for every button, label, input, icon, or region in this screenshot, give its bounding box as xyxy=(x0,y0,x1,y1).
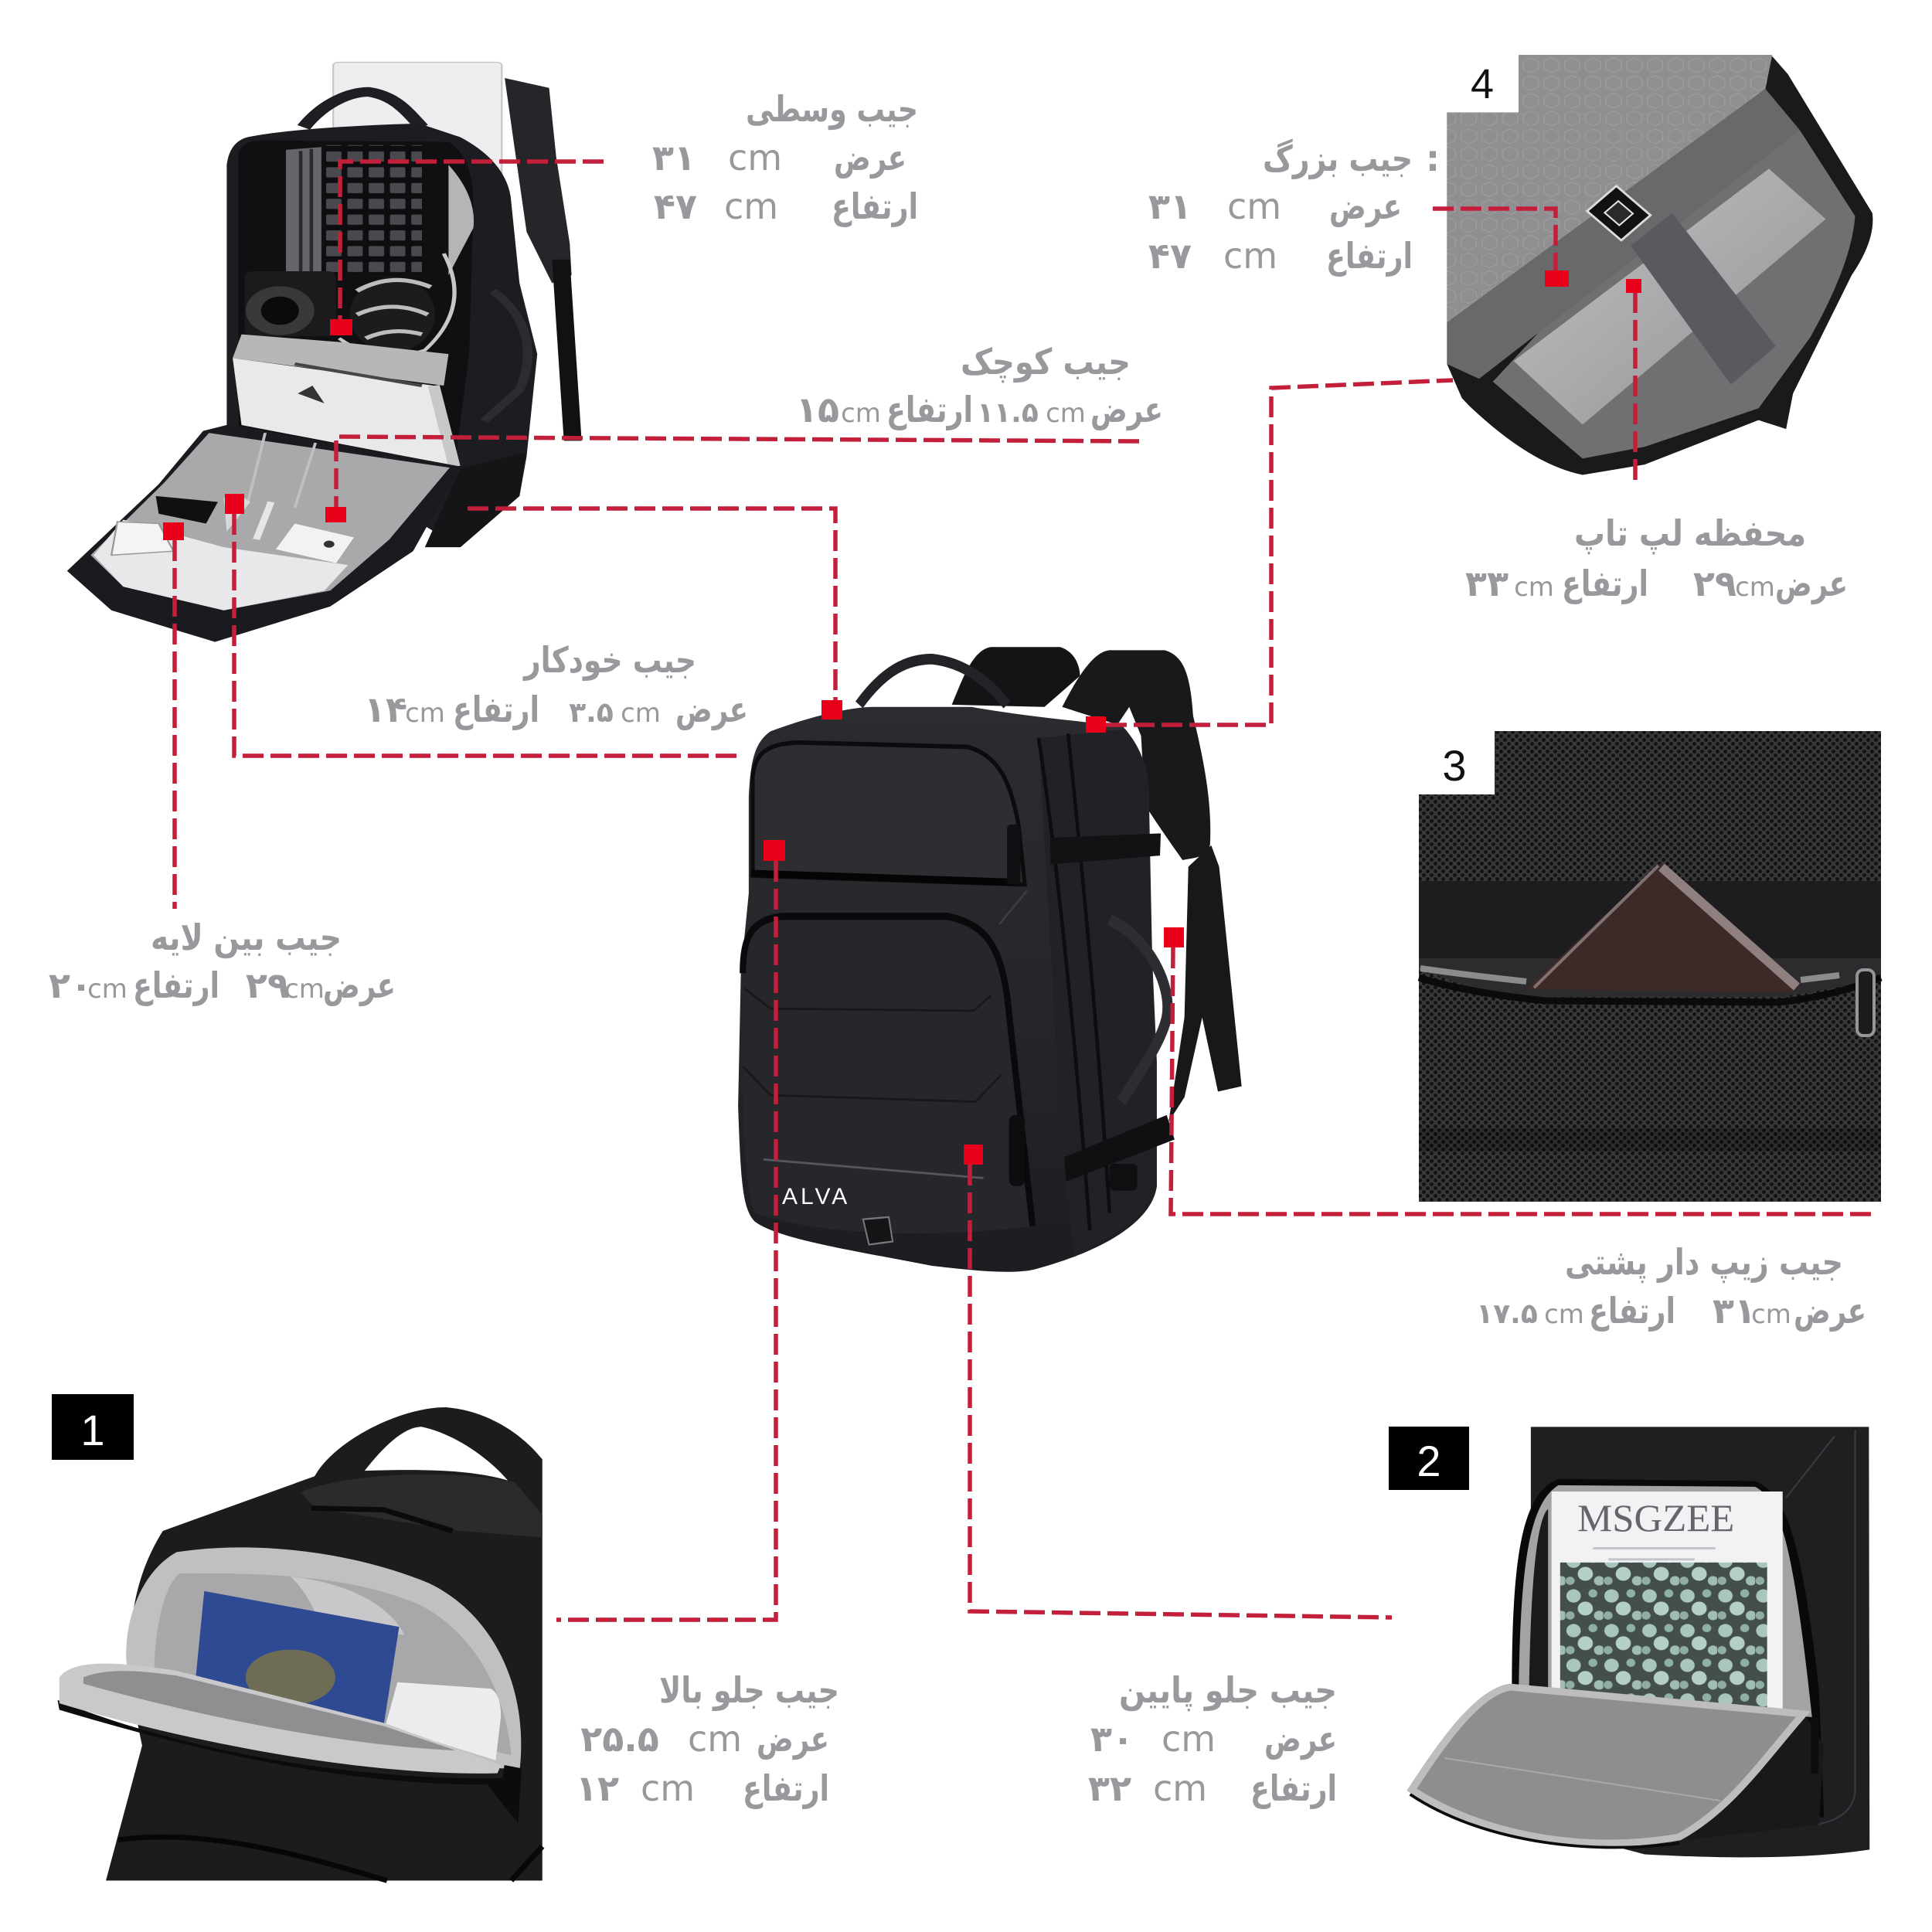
label: middle pocket: ۳۱ xyxy=(652,137,696,179)
buckle xyxy=(1587,186,1651,240)
upper side buckle xyxy=(1050,833,1161,865)
label: laptop sleeve: ۳۳ xyxy=(1465,563,1509,604)
label: pen pocket: عرض xyxy=(675,689,748,730)
strap band xyxy=(1419,881,1881,958)
badge box xyxy=(1447,39,1519,97)
label: laptop sleeve xyxy=(1465,512,1848,604)
second pen xyxy=(257,502,271,539)
label: front upper pocket: ۱۲ xyxy=(576,1767,619,1809)
badge box xyxy=(52,1394,134,1460)
label: back zip pocket: ۳۱ xyxy=(1713,1290,1756,1332)
magazine image xyxy=(1560,1563,1767,1717)
headphones cup xyxy=(350,277,435,352)
hex flap xyxy=(1447,55,1772,322)
label: front lower pocket: ارتفاع xyxy=(1250,1767,1337,1809)
leader line: laptop sleeve xyxy=(1633,292,1638,487)
label: between layer pocket: جیب بین لایه xyxy=(151,917,342,958)
marker: middle pocket xyxy=(330,319,352,335)
badge number: 4 xyxy=(1471,61,1494,107)
marker: pen pocket xyxy=(225,494,244,514)
label: back zip pocket: cm xyxy=(1544,1299,1584,1330)
flap rim xyxy=(60,1664,501,1774)
label: middle pocket xyxy=(652,88,918,227)
label: small pocket: ۱۱.۵ xyxy=(977,397,1039,429)
band xyxy=(1447,89,1800,379)
label: between layer pocket: cm xyxy=(87,974,128,1005)
label: front lower pocket: cm xyxy=(1162,1718,1216,1760)
label: small pocket: cm xyxy=(841,398,881,429)
grey piping xyxy=(764,1159,983,1178)
leader line: small pocket xyxy=(336,437,1139,508)
leader line: middle pocket xyxy=(340,162,604,320)
book cover xyxy=(233,358,448,464)
badge box xyxy=(1419,731,1495,794)
label: big pocket: cm xyxy=(1227,185,1281,227)
magazine xyxy=(1552,1492,1783,1719)
pocket opening xyxy=(1512,1479,1824,1818)
badge: 2 xyxy=(1389,1427,1469,1490)
label: pen pocket: ارتفاع xyxy=(453,689,539,730)
book figure xyxy=(298,386,325,403)
label: big pocket: ۳۱ xyxy=(1148,185,1192,227)
leader line: big pocket xyxy=(1433,209,1556,270)
marker: shoulder xyxy=(1086,716,1106,733)
leader line: front upper pocket xyxy=(556,861,776,1620)
bag body xyxy=(738,707,1157,1272)
label: between layer pocket: ۲۹ xyxy=(246,964,289,1006)
flap lining xyxy=(90,433,450,611)
label: front upper pocket: عرض xyxy=(757,1718,829,1760)
lower pocket zip xyxy=(743,917,1032,1226)
label: back zip pocket xyxy=(1476,1241,1866,1332)
interior xyxy=(239,141,474,467)
label: front lower pocket: جیب جلو پایین xyxy=(1119,1669,1337,1712)
flap shell xyxy=(67,424,461,642)
right shoulder strap xyxy=(1062,650,1210,860)
magazine small lines xyxy=(1593,1548,1716,1560)
marker: back zip pocket xyxy=(1164,927,1184,947)
leader line: between layer pocket xyxy=(172,540,177,909)
hanging strap xyxy=(552,260,582,440)
flap inner xyxy=(83,1671,456,1750)
lower pocket xyxy=(742,917,1032,1233)
mesh background xyxy=(1419,731,1881,1202)
badge number: 2 xyxy=(1417,1437,1441,1485)
headphones xyxy=(350,277,435,352)
lower side lock xyxy=(1110,1164,1137,1190)
label: middle pocket: cm xyxy=(724,185,778,227)
label: small pocket: cm xyxy=(1046,398,1086,429)
label: front lower pocket: عرض xyxy=(1264,1718,1337,1760)
inner shadow xyxy=(1529,1509,1548,1692)
panel: main backpack xyxy=(738,647,1242,1272)
interior highlight xyxy=(291,1577,404,1635)
label: back zip pocket: عرض xyxy=(1794,1290,1866,1332)
panel: open backpack, main compartment xyxy=(67,63,582,642)
wallet stitching xyxy=(1534,866,1658,988)
label: front lower pocket: cm xyxy=(1153,1767,1207,1809)
leader line: front lower pocket xyxy=(970,1165,1392,1617)
panel 1: front upper pocket xyxy=(58,1407,543,1880)
book title xyxy=(294,364,422,386)
flap seam xyxy=(1444,1758,1720,1801)
books xyxy=(233,335,454,467)
pocket lining xyxy=(1519,1485,1812,1717)
keyboard xyxy=(325,145,422,275)
quilt lines xyxy=(743,988,1001,1102)
camera body xyxy=(244,271,336,336)
marker: between layer pocket xyxy=(163,522,184,540)
pocket rim xyxy=(126,1547,521,1768)
label: laptop sleeve: عرض xyxy=(1775,563,1848,604)
top pocket xyxy=(753,743,1025,884)
left sleeve xyxy=(286,147,321,271)
strap xyxy=(1631,213,1776,385)
passport xyxy=(196,1591,399,1726)
shell xyxy=(1447,55,1872,474)
zip edge xyxy=(1419,978,1881,1002)
label: laptop sleeve: محفظه لپ تاپ xyxy=(1574,512,1806,554)
sleeve highlight xyxy=(301,149,311,271)
panel 4: big pocket and laptop sleeve xyxy=(1447,55,1872,474)
top handle xyxy=(859,659,1007,705)
badge number: 1 xyxy=(80,1406,105,1454)
label: pen pocket: ۳.۵ xyxy=(569,697,614,729)
label: laptop sleeve: ۲۹ xyxy=(1693,563,1736,604)
label: small pocket: ارتفاع xyxy=(886,389,973,430)
flap dark lip xyxy=(58,1700,522,1824)
buckle outer xyxy=(1587,186,1651,240)
label: back zip pocket: ۱۷.۵ xyxy=(1476,1298,1538,1330)
zip opening xyxy=(1419,958,1881,997)
label: back zip pocket: جیب زیپ دار پشتی xyxy=(1565,1241,1843,1284)
left shoulder strap xyxy=(952,647,1080,707)
magazine title: MSGZEE xyxy=(1577,1498,1734,1539)
diagonal seam xyxy=(999,891,1027,924)
side seams xyxy=(1039,733,1110,1230)
bottom tab xyxy=(863,1217,893,1244)
camera xyxy=(244,271,336,336)
lower mesh shadow xyxy=(1419,1128,1881,1151)
logo: ALVA: ALVA xyxy=(782,1184,850,1209)
label: between layer pocket: عرض xyxy=(323,964,396,1006)
label: laptop sleeve: cm xyxy=(1735,572,1775,603)
bag body xyxy=(226,124,537,547)
marker: laptop sleeve xyxy=(1626,279,1641,293)
label: front lower pocket: ۳۲ xyxy=(1088,1767,1131,1809)
label: between layer pocket xyxy=(49,917,396,1006)
grey lining xyxy=(448,165,474,275)
laptop sticking out xyxy=(333,63,502,181)
marker: big pocket xyxy=(1545,270,1569,287)
label: big pocket xyxy=(1148,138,1440,277)
label: middle pocket: جیب وسطی xyxy=(746,88,918,130)
label: small pocket: عرض xyxy=(1090,389,1163,430)
label: pen pocket: cm xyxy=(405,698,445,729)
marker: front lower pocket xyxy=(964,1145,983,1165)
card xyxy=(111,522,174,555)
label: front lower pocket: ۳۰ xyxy=(1090,1718,1134,1760)
top zip pull xyxy=(1007,825,1020,884)
top zip xyxy=(311,1509,453,1531)
hanging strap xyxy=(1168,845,1242,1121)
label: big pocket: cm xyxy=(1223,235,1277,277)
lower side buckle xyxy=(1064,1115,1175,1182)
wallet xyxy=(1526,863,1799,993)
label: between layer pocket: cm xyxy=(284,974,325,1005)
label: big pocket: ۴۷ xyxy=(1148,235,1192,277)
badge box xyxy=(1389,1427,1469,1490)
flap outer edge xyxy=(1410,1794,1679,1848)
label: middle pocket: عرض xyxy=(834,137,906,179)
bag shell xyxy=(1531,1427,1869,1857)
lower zip lock xyxy=(1009,1115,1025,1186)
leader line: shoulder to panel 4 xyxy=(1106,380,1453,725)
label: front upper pocket xyxy=(576,1669,839,1809)
label: between layer pocket: ارتفاع xyxy=(133,964,219,1006)
headphones highlights xyxy=(357,280,430,338)
laptop xyxy=(1514,168,1826,424)
label: small pocket: جیب کوچک xyxy=(961,341,1131,383)
panel 3: back zip pocket xyxy=(1419,731,1881,1202)
handle gap xyxy=(365,1427,508,1481)
label: big pocket: عرض xyxy=(1329,185,1402,227)
label: front upper pocket: جیب جلو بالا xyxy=(659,1669,839,1711)
label: middle pocket: cm xyxy=(728,137,782,179)
badge: 4 xyxy=(1447,39,1519,107)
label: big pocket: ارتفاع xyxy=(1326,235,1413,277)
flap divider xyxy=(247,433,315,508)
label: laptop sleeve: ارتفاع xyxy=(1562,563,1648,604)
lower pocket line xyxy=(118,1837,543,1880)
label: laptop sleeve: cm xyxy=(1514,572,1554,603)
top pocket shadow xyxy=(750,873,1015,883)
side grab handle xyxy=(484,291,528,421)
opening highlight xyxy=(1420,968,1839,981)
wallet edge xyxy=(1662,867,1797,987)
top handle xyxy=(304,92,422,128)
top panel xyxy=(301,1475,543,1537)
charger xyxy=(386,1682,501,1760)
marker: front upper pocket xyxy=(764,840,785,861)
label: pen pocket xyxy=(364,639,748,730)
label: big pocket: : xyxy=(1426,138,1440,179)
label: middle pocket: ۴۷ xyxy=(654,185,697,227)
label: front upper pocket: cm xyxy=(641,1767,695,1809)
label: back zip pocket: cm xyxy=(1751,1299,1791,1330)
pen xyxy=(224,498,250,532)
zip pull xyxy=(1811,1717,1818,1774)
zip pull xyxy=(1857,970,1874,1036)
panel 2: front lower pocket xyxy=(1410,1427,1869,1857)
dark wedge xyxy=(1686,1713,1824,1840)
phone camera xyxy=(324,540,335,548)
leader line: handle to main backpack xyxy=(468,509,835,701)
flap xyxy=(1412,1687,1804,1843)
flap light area xyxy=(94,519,348,611)
book edge xyxy=(434,386,454,467)
label: front upper pocket: ارتفاع xyxy=(743,1767,829,1809)
label: front upper pocket: cm xyxy=(688,1718,742,1760)
label: between layer pocket: ۲۰ xyxy=(49,964,92,1006)
badge number: 3 xyxy=(1442,741,1467,790)
label: front lower pocket xyxy=(1088,1669,1337,1809)
label: back zip pocket: ارتفاع xyxy=(1589,1290,1675,1332)
label: middle pocket: ارتفاع xyxy=(832,185,918,227)
label: pen pocket: ۱۴ xyxy=(364,689,407,730)
cable xyxy=(339,253,454,355)
leader line: pen pocket xyxy=(234,514,743,756)
camera lens xyxy=(246,286,315,335)
interior lining xyxy=(1493,89,1855,458)
side grab handle xyxy=(1110,920,1168,1102)
front flap xyxy=(67,424,461,642)
label: small pocket: ۱۵ xyxy=(796,389,839,430)
buckle inner xyxy=(1604,201,1633,225)
label: pen pocket: جیب خودکار xyxy=(522,639,696,681)
back strap xyxy=(505,78,572,283)
label: front upper pocket: ۲۵.۵ xyxy=(580,1718,659,1760)
side panel xyxy=(1039,730,1157,1257)
badge: 1 xyxy=(52,1394,134,1460)
bag shell xyxy=(106,1407,543,1880)
shell seam xyxy=(1786,1430,1855,1825)
phone xyxy=(276,524,354,563)
leader line: back zip pocket xyxy=(1171,947,1872,1214)
label: pen pocket: cm xyxy=(621,698,661,729)
pocket interior xyxy=(155,1573,512,1755)
label: big pocket: جیب بزرگ xyxy=(1263,138,1413,179)
camera glass xyxy=(261,297,299,325)
passport emblem xyxy=(246,1650,335,1705)
book spine xyxy=(233,335,448,386)
marker: main backpack top xyxy=(821,700,842,719)
dark wallet xyxy=(156,496,218,524)
marker: small pocket xyxy=(325,507,346,522)
base straps xyxy=(425,453,526,547)
label: small pocket xyxy=(796,341,1163,430)
